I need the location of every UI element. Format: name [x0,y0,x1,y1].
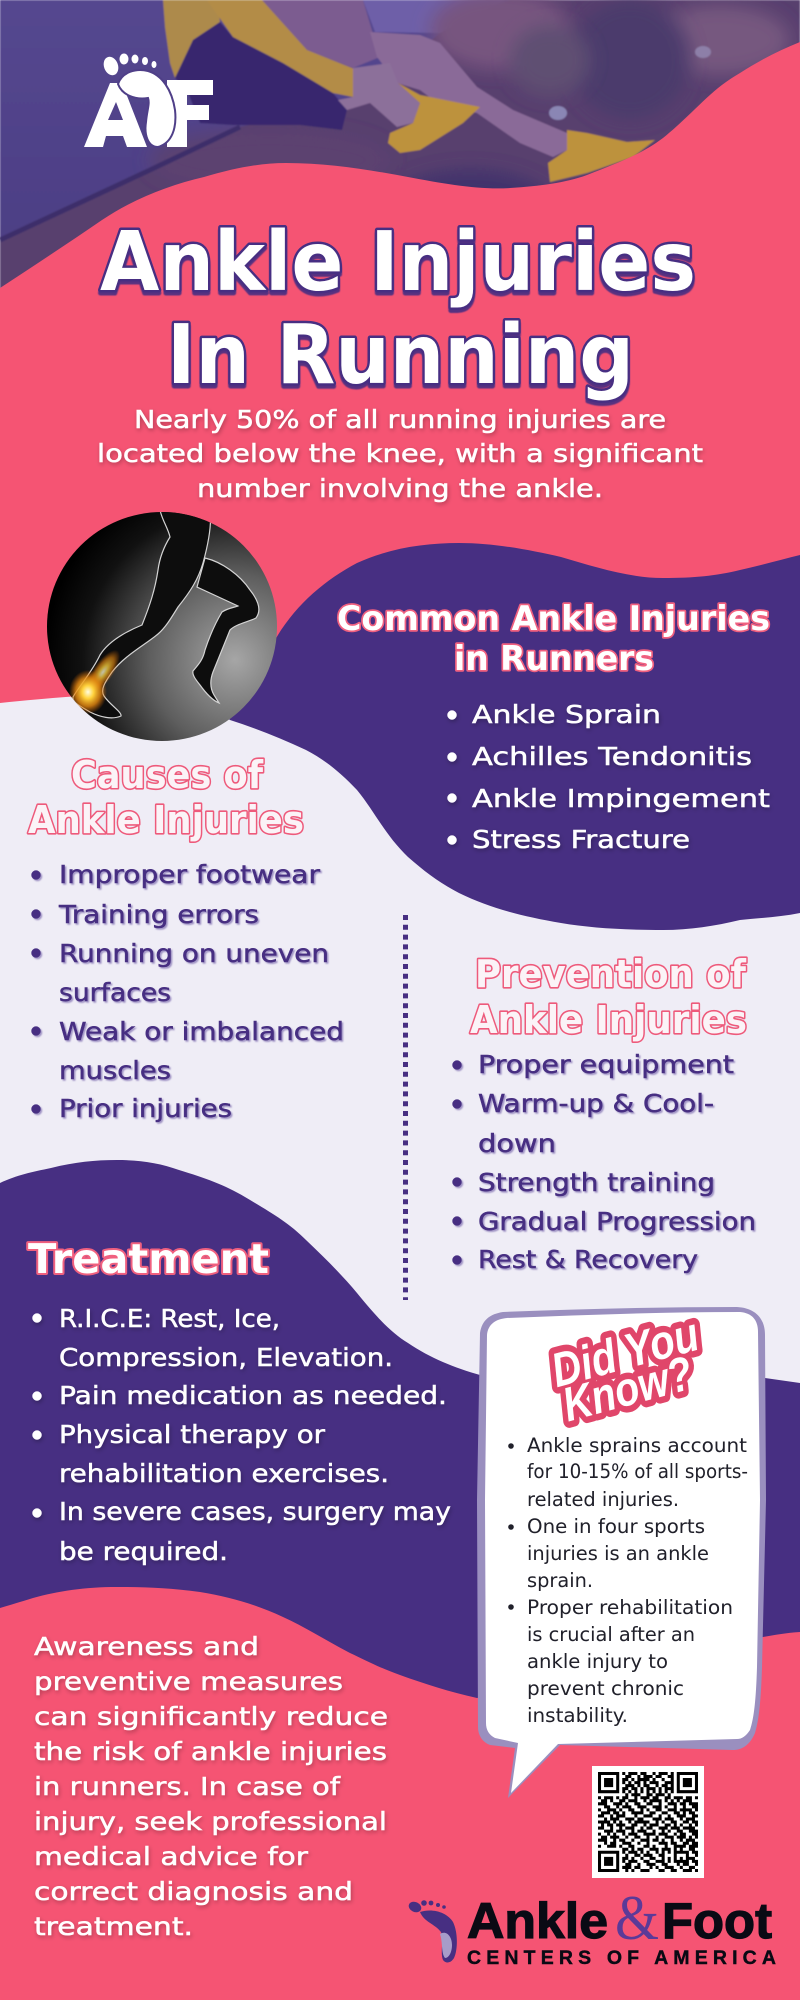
did you know lettering [546,1308,714,1433]
closing paragraph: medical advice for [34,1842,309,1871]
callout: did you know speech bubble [477,1307,766,1798]
did you know facts: sprain. [527,1569,593,1592]
list: Achilles Tendonitis [472,742,752,771]
closing paragraph: can significantly reduce [34,1702,388,1731]
list: Prior injuries [59,1094,232,1123]
did you know facts: prevent chronic [527,1677,684,1700]
did you know facts: instability. [527,1704,628,1727]
list [32,860,344,1123]
closing paragraph: Awareness and [34,1632,259,1661]
footer logo: Ankle & Foot Centers of America: & [615,1882,659,1953]
closing paragraph: treatment. [34,1912,193,1941]
closing paragraph [34,1632,388,1941]
did you know facts: related injuries. [527,1488,679,1511]
list: Weak or imbalanced [59,1017,344,1046]
did you know lettering: Did You [546,1308,704,1398]
pink wave: closing panel [0,1587,800,2000]
header photo: runner holding ankle [0,0,800,300]
did you know facts: injuries is an ankle [527,1542,709,1565]
purple wave: common injuries panel [200,543,800,930]
heading: Prevention of [475,952,746,996]
panel: treatment [28,1235,451,1566]
list: Stress Fracture [472,825,690,854]
subtitle: Nearly 50% of all running injuries are [134,405,666,434]
logo: AF foot mark [84,54,213,147]
title [100,215,696,403]
panel: prevention of ankle injuries [452,952,756,1274]
list: Strength training [478,1168,715,1197]
heading [470,952,747,1042]
did you know facts [508,1434,748,1727]
did you know facts: Proper rehabilitation [527,1596,733,1619]
logo foot [118,70,175,147]
heading: Ankle Injuries [28,798,304,842]
purple wave: treatment panel [0,1160,800,1700]
list: muscles [59,1056,171,1085]
subtitle: located below the knee, with a significant [97,439,703,468]
list: Warm-up & Cool- [478,1089,714,1118]
list: Pain medication as needed. [59,1381,447,1410]
list: Rest & Recovery [478,1245,698,1274]
did you know lettering: Know? [557,1347,698,1432]
dotted divider [403,915,408,1300]
bubble outline [477,1307,766,1798]
logo letter F [167,80,213,147]
list: Training errors [58,900,259,929]
list [452,1050,756,1274]
title: Ankle Injuries [100,215,696,310]
list: R.I.C.E: Rest, Ice, [59,1304,280,1333]
did you know facts: Ankle sprains account [527,1434,747,1457]
list [448,700,770,854]
list: be required. [59,1537,228,1566]
back leg [193,558,259,703]
did you know facts: for 10-15% of all sports- [527,1460,748,1483]
ankle glow [70,650,120,714]
list: Improper footwear [59,860,321,889]
heading: Treatment [28,1235,269,1283]
subtitle: number involving the ankle. [197,474,603,503]
did you know facts: ankle injury to [527,1650,668,1673]
subtitle [97,405,703,503]
title: In Running [167,308,634,403]
footer foot icon [407,1900,457,1962]
footer logo: Ankle & Foot Centers of America [407,1882,776,1969]
pink wave: title panel [0,42,800,703]
closing paragraph: the risk of ankle injuries [34,1737,387,1766]
heading: Common Ankle Injuries [337,599,770,639]
heading [28,753,304,842]
heading: in Runners [454,639,654,679]
heading: Causes of [71,753,263,797]
did you know lettering: Know? [557,1347,698,1432]
closing paragraph: correct diagnosis and [34,1877,353,1906]
heading: Ankle Injuries [470,998,747,1042]
list: Proper equipment [478,1050,734,1079]
list: Ankle Sprain [472,700,661,729]
did you know facts: is crucial after an [527,1623,695,1646]
footer logo: Ankle & Foot Centers of America: CENTERS OF AMERICA [467,1947,776,1969]
heading [337,599,770,679]
runner image [47,510,277,742]
footer wordmark: Ankle [467,1893,608,1949]
did you know facts: One in four sports [527,1515,705,1538]
bubble fill [485,1312,760,1793]
logo toes [101,54,156,77]
list: Physical therapy or [59,1420,326,1449]
did you know lettering: Did You [546,1308,704,1398]
list: surfaces [59,978,171,1007]
list: In severe cases, surgery may [59,1497,451,1526]
QR code [592,1766,704,1878]
closing paragraph: injury, seek professional [34,1807,387,1836]
front leg [73,510,211,718]
list: Gradual Progression [478,1207,756,1236]
list: Compression, Elevation. [59,1343,393,1372]
panel: causes of ankle injuries [28,753,344,1123]
list: Running on uneven [59,939,329,968]
footer logo: Ankle & Foot Centers of America: Foot [662,1893,772,1949]
closing paragraph: in runners. In case of [34,1772,341,1801]
logo letter A [84,83,147,147]
panel: common ankle injuries [337,599,770,854]
list: rehabilitation exercises. [59,1459,389,1488]
closing paragraph: preventive measures [34,1667,343,1696]
list [32,1304,451,1566]
list: down [478,1129,556,1158]
list: Ankle Impingement [472,784,770,813]
